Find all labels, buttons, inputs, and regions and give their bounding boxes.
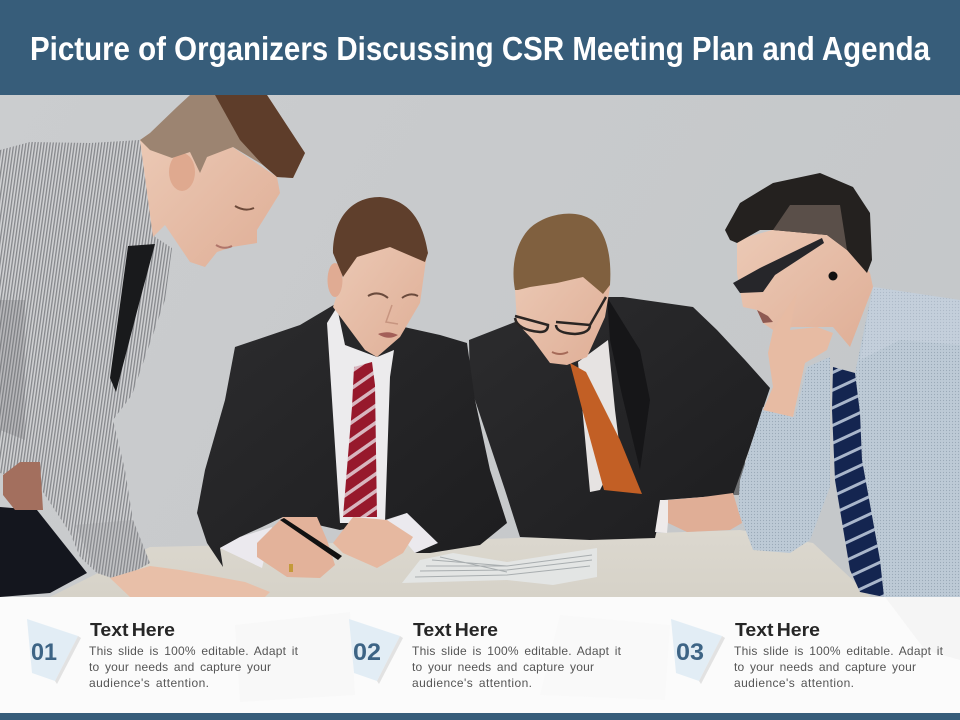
face [737,225,873,347]
person: right man in light blue shirt with navy tie [725,173,960,597]
badge 02 [349,619,403,684]
badge 01: 01 [31,639,57,666]
body 03: to your needs and capture your [734,660,916,674]
body 01 [89,644,299,690]
hair [333,197,428,277]
face [333,232,427,357]
body 02 [412,644,622,690]
header band [0,0,960,95]
body 02: audience's attention. [412,676,532,690]
person: second man in black suit with red tie [197,197,507,578]
face [140,125,280,267]
document on the table [402,548,597,585]
body 01: This slide is 100% editable. Adapt it [89,644,299,658]
body 03: audience's attention. [734,676,854,690]
heading 01: Text Here [90,620,175,640]
footer band [0,713,960,720]
hair [513,214,610,294]
glasses and earring [733,238,838,293]
face [515,250,610,365]
hair [725,173,872,273]
sleeve [738,357,830,553]
badge 03 [671,619,725,684]
heading 03: Text Here [735,620,820,640]
badge 02: 02 [353,639,381,666]
chair [723,447,745,495]
badge 01 [27,619,81,684]
body 02: This slide is 100% editable. Adapt it [412,644,622,658]
body 03 [734,644,944,690]
meeting table [48,530,872,598]
body 01: to your needs and capture your [89,660,271,674]
person: third man in black suit with orange tie [469,214,770,540]
navy tie [832,367,884,597]
body 01: audience's attention. [89,676,209,690]
heading 02: Text Here [413,620,498,640]
person: left man in striped shirt [0,95,305,597]
glasses [515,297,606,334]
body 02: to your needs and capture your [412,660,594,674]
item 01 [27,619,299,690]
bottom panel [0,597,960,713]
photo: four organizers at a meeting table [0,95,960,598]
body 03: This slide is 100% editable. Adapt it [734,644,944,658]
item 03 [671,619,944,690]
badge 03: 03 [676,639,704,666]
hair [140,95,305,178]
hand [763,293,833,417]
item 02 [349,619,622,690]
shirt body [855,287,960,597]
